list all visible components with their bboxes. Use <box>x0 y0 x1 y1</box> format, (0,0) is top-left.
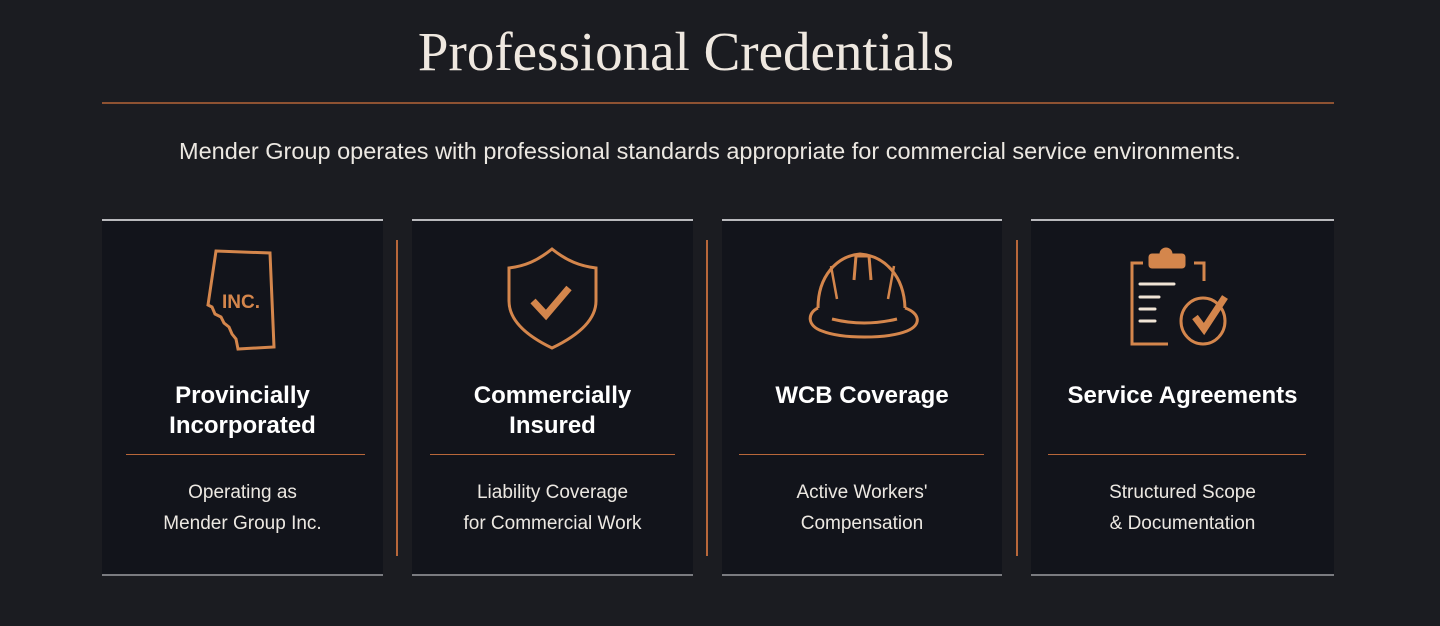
description <box>463 482 642 534</box>
description: Active Workers' <box>796 482 928 503</box>
icon: alberta inc <box>206 250 276 351</box>
description: for Commercial Work <box>463 513 642 534</box>
card title <box>169 382 316 439</box>
card title: Provincially <box>175 382 310 409</box>
panel: commercially insured <box>412 219 693 576</box>
icon: shield check <box>508 247 598 350</box>
panel: wcb coverage <box>722 219 1002 576</box>
card title: Insured <box>509 412 596 439</box>
panel: service agreements <box>1031 219 1334 576</box>
description <box>796 482 928 534</box>
description: Compensation <box>801 513 923 534</box>
icon: hard hat <box>808 252 919 338</box>
description: Operating as <box>188 482 297 503</box>
card title: Commercially <box>474 382 631 409</box>
card title <box>474 382 632 439</box>
description <box>163 482 322 534</box>
card title: Service Agreements <box>1068 382 1297 409</box>
icon: alberta inc: INC. <box>222 292 260 313</box>
divider <box>396 240 398 556</box>
subtitle: Mender Group operates with professional standards appropriate for commercial service environments. <box>179 138 1241 164</box>
description: Mender Group Inc. <box>163 513 322 534</box>
description: Liability Coverage <box>477 482 628 503</box>
icon: clipboard check <box>1130 248 1228 346</box>
divider <box>1016 240 1018 556</box>
divider <box>706 240 708 556</box>
description: & Documentation <box>1110 513 1255 534</box>
card title: Incorporated <box>169 412 316 439</box>
panel: provincially incorporated <box>102 219 383 576</box>
card title: WCB Coverage <box>775 382 949 409</box>
title: Professional Credentials <box>418 21 954 82</box>
description: Structured Scope <box>1109 482 1256 503</box>
description <box>1109 482 1256 534</box>
